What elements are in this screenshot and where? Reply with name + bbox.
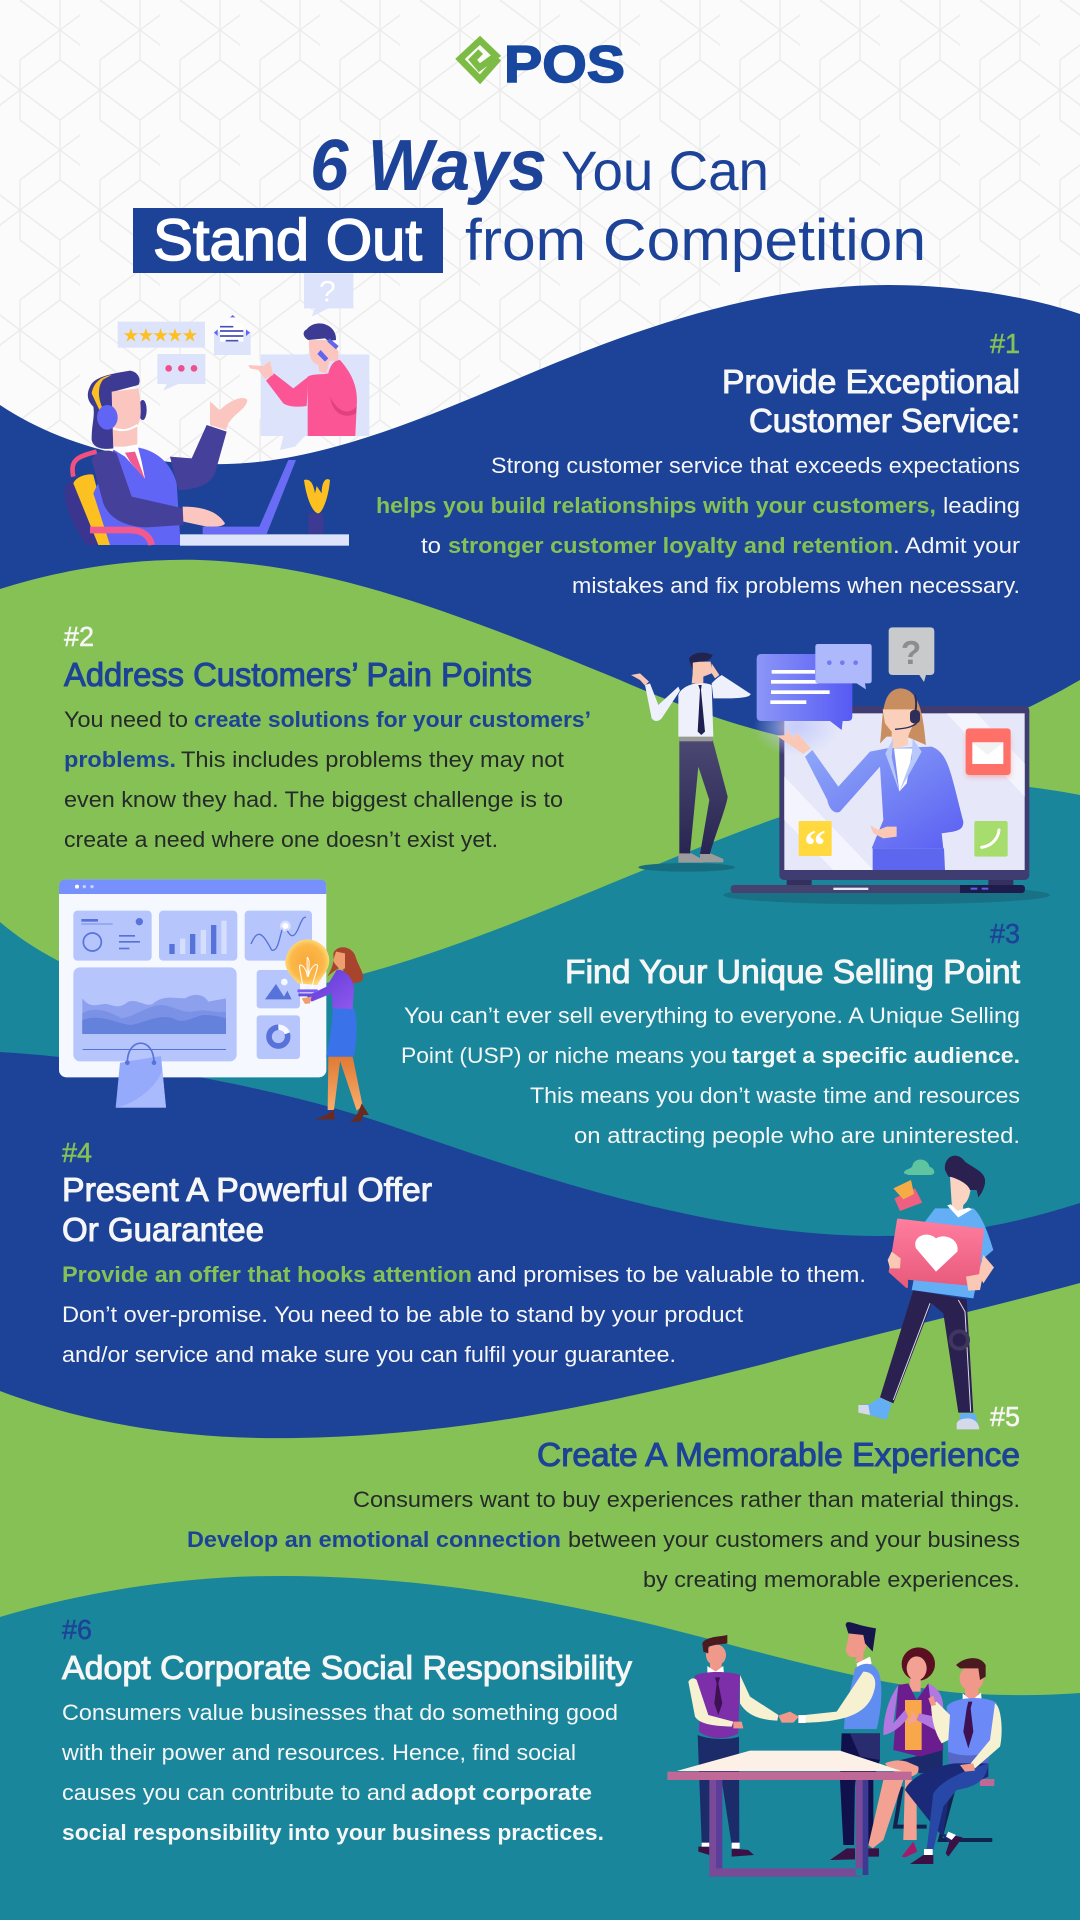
- body 5: between your customers and your business: [568, 1527, 1020, 1552]
- section 4 text: #4: [62, 1137, 92, 1168]
- body 4: [62, 1262, 866, 1367]
- body 1: . Admit your: [893, 533, 1020, 558]
- body 1: mistakes and fix problems when necessary.: [572, 573, 1020, 598]
- seated man: [905, 1658, 1002, 1864]
- heading 3: Find Your Unique Selling Point: [565, 953, 1020, 990]
- illustration: customer service agent and caller: ★: [182, 325, 198, 346]
- section 3 text: [401, 918, 1020, 1148]
- heading 6: Adopt Corporate Social Responsibility: [62, 1649, 633, 1686]
- illustration: man on phone and support woman on laptop screen: [631, 627, 1050, 904]
- speech bubbles: ?: [901, 635, 921, 672]
- title: 6 Ways: [310, 126, 547, 206]
- body 2: [64, 707, 591, 852]
- body 5: by creating memorable experiences.: [643, 1567, 1020, 1592]
- body 4: Provide an offer that hooks attention: [62, 1262, 472, 1287]
- body 5: Develop an emotional connection: [187, 1527, 561, 1552]
- illustration: customer service agent and caller: ?: [319, 276, 336, 309]
- illustration: customer service agent and caller: [65, 273, 369, 546]
- section 2 text: #2: [64, 621, 94, 652]
- body 3: [401, 1003, 1020, 1148]
- body 3: This means you don’t waste time and resources: [530, 1083, 1020, 1108]
- section 3 text: #3: [990, 918, 1020, 949]
- heading 2: Address Customers’ Pain Points: [64, 656, 532, 693]
- section 4 text: [62, 1137, 866, 1367]
- illustration: customer service agent and caller: ★: [152, 325, 169, 346]
- support woman: [777, 688, 963, 870]
- heading 1: Provide Exceptional: [722, 363, 1020, 400]
- app icons: “: [804, 822, 826, 870]
- body 6: adopt corporate: [411, 1780, 592, 1805]
- body 4: and/or service and make sure you can fulfil your guarantee.: [62, 1342, 676, 1367]
- title: Stand Out: [153, 208, 422, 273]
- body 6: social responsibility into your business practices.: [62, 1820, 604, 1845]
- table: [667, 1751, 912, 1877]
- wave: section 6 teal: [0, 1576, 1080, 1920]
- body 2: create a need where one doesn’t exist yet.: [64, 827, 498, 852]
- body 3: target a specific audience.: [732, 1043, 1020, 1068]
- wave: section 4 blue: [0, 1052, 1080, 1920]
- body 3: Point (USP) or niche means you: [401, 1043, 727, 1068]
- speech bubbles: [757, 627, 934, 730]
- body 6: with their power and resources. Hence, find social: [61, 1740, 576, 1765]
- body 6: Consumers value businesses that do something good: [62, 1700, 618, 1725]
- body 4: Don’t over-promise. You need to be able to stand by your product: [62, 1302, 743, 1327]
- stool: [895, 1779, 994, 1840]
- woman with bulb: [285, 939, 369, 1122]
- section 6 text: [61, 1614, 633, 1845]
- man on phone: [631, 653, 751, 872]
- body 5: [187, 1487, 1020, 1592]
- illustration: customer service agent and caller: ★: [167, 325, 183, 346]
- logo wordmark: POS: [504, 36, 625, 94]
- shopping bag: [116, 1043, 166, 1108]
- illustration: customer service agent and caller: ★: [123, 325, 139, 346]
- heading 4: Present A Powerful Offer: [62, 1171, 432, 1208]
- wave: section 5 green: [0, 1283, 1080, 1920]
- man left: [688, 1635, 778, 1857]
- wave: section 2 green: [0, 560, 1080, 1920]
- logo: ePOS: [460, 36, 625, 94]
- body 1: Strong customer service that exceeds expectations: [491, 453, 1020, 478]
- section 2 text: [64, 621, 591, 852]
- body 5: Consumers want to buy experiences rather than material things.: [353, 1487, 1020, 1512]
- body 2: This includes problems they may not: [181, 747, 564, 772]
- body 6: [61, 1700, 618, 1845]
- section 6 text: #6: [62, 1614, 92, 1645]
- heading 5: Create A Memorable Experience: [537, 1436, 1020, 1473]
- icon: green e mark: [460, 40, 499, 79]
- wave: section 3 teal: [0, 783, 1080, 1920]
- laptop: [723, 706, 1050, 904]
- body 6: causes you can contribute to and: [62, 1780, 406, 1805]
- heading 4: [62, 1171, 432, 1248]
- section 5 text: #5: [990, 1401, 1020, 1432]
- illustration: man holding heart card: [858, 1156, 994, 1429]
- section 1 text: [376, 328, 1020, 598]
- body 3: You can’t ever sell everything to everyone. A Unique Selling: [404, 1003, 1020, 1028]
- body 2: problems.: [64, 747, 176, 772]
- title: from Competition: [465, 208, 926, 273]
- heading 4: Or Guarantee: [62, 1211, 264, 1248]
- heading 1: Customer Service:: [749, 402, 1020, 439]
- body 3: on attracting people who are uninterested.: [574, 1123, 1020, 1148]
- body 1: to: [421, 533, 441, 558]
- title: [133, 126, 926, 273]
- illustration: customer service agent and caller: ★: [138, 325, 154, 346]
- app icons: [799, 728, 1011, 870]
- body 2: even know they had. The biggest challenge is to: [64, 787, 563, 812]
- section 5 text: [187, 1401, 1020, 1592]
- body 1: leading: [943, 493, 1020, 518]
- seated woman: [868, 1647, 943, 1857]
- heading 1: [722, 363, 1020, 439]
- title: You Can: [561, 139, 769, 202]
- body 1: helps you build relationships with your customers,: [376, 493, 936, 518]
- illustration: business people shaking hands at a table: [667, 1622, 1002, 1877]
- body 2: create solutions for your customers’: [194, 707, 591, 732]
- body 1: [376, 453, 1020, 598]
- body 4: and promises to be valuable to them.: [477, 1262, 866, 1287]
- body 2: You need to: [64, 707, 188, 732]
- section 1 text: #1: [990, 328, 1020, 359]
- man standing right: [778, 1622, 881, 1860]
- illustration: dashboard monitor, shopping bag and woman with light bulb: [59, 879, 369, 1122]
- body 1: stronger customer loyalty and retention: [448, 533, 893, 558]
